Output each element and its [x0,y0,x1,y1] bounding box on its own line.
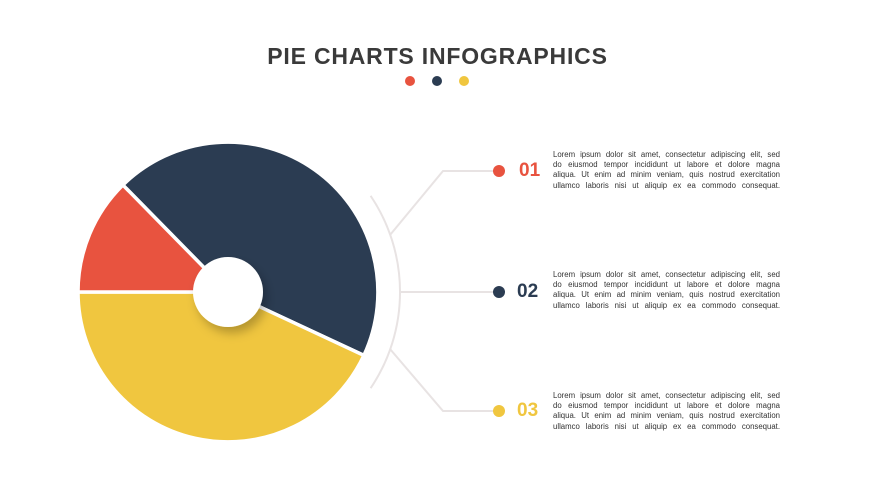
text block 02: aliqua. Ut enim ad minim veniam, quis nostrud exercitation [553,290,780,299]
text block 01: do eiusmod tempor incididunt ut labore et dolore magna [553,160,780,169]
text block 03: ullamco laboris nisi ut aliquip ex ea commodo consequat. [553,422,780,431]
text block 01 [553,150,780,190]
label 03: 03 [517,400,538,421]
text block 02 [553,270,780,310]
text block 02: Lorem ipsum dolor sit amet, consectetur adipiscing elit, sed [553,270,780,279]
text block 03 [553,391,780,431]
title: PIE CHARTS INFOGRAPHICS [267,43,608,69]
text block 02: do eiusmod tempor incididunt ut labore et dolore magna [553,280,780,289]
text block 01: ullamco laboris nisi ut aliquip ex ea commodo consequat. [553,181,780,190]
text block 02: ullamco laboris nisi ut aliquip ex ea commodo consequat. [553,301,780,310]
label 01: 01 [519,160,540,181]
text block 03: Lorem ipsum dolor sit amet, consectetur adipiscing elit, sed [553,391,780,400]
text block 01: aliqua. Ut enim ad minim veniam, quis nostrud exercitation [553,170,780,179]
text block 01: Lorem ipsum dolor sit amet, consectetur adipiscing elit, sed [553,150,780,159]
text block 03: aliqua. Ut enim ad minim veniam, quis nostrud exercitation [553,411,780,420]
text block 03: do eiusmod tempor incididunt ut labore et dolore magna [553,401,780,410]
label 02: 02 [517,281,538,302]
